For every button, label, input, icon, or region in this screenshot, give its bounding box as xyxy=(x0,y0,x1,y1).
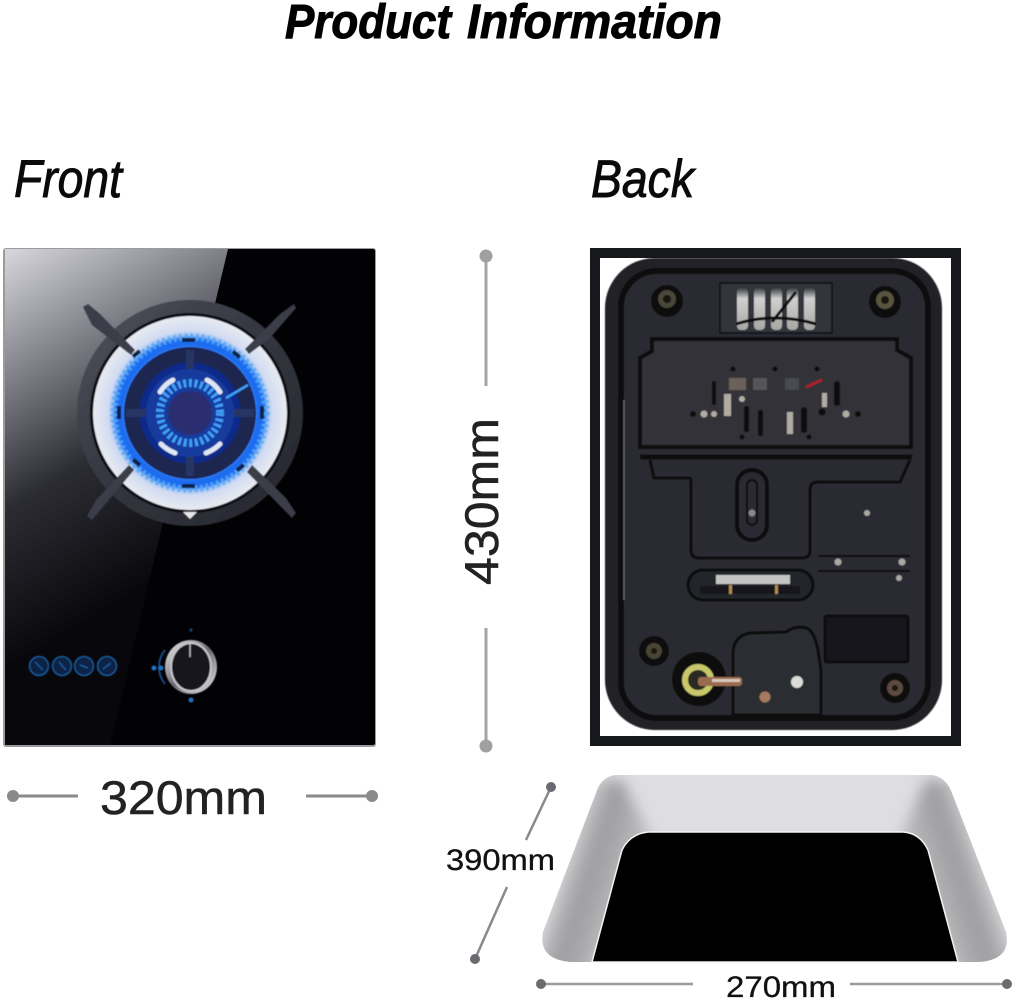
gas inlet xyxy=(672,652,742,706)
dimension: 320mm width: 320mm xyxy=(100,771,267,824)
lower T-shaped stamping xyxy=(640,457,912,558)
right rail xyxy=(818,510,910,581)
vent grille xyxy=(720,283,832,333)
burner cap spokes xyxy=(126,350,254,476)
pan support prongs xyxy=(83,304,296,520)
long oval window xyxy=(688,570,813,600)
back shell xyxy=(605,258,942,730)
title xyxy=(285,0,722,49)
frame xyxy=(595,253,956,741)
dimension: 270mm width xyxy=(536,971,1012,1001)
edge highlight xyxy=(623,400,625,600)
tray walls xyxy=(542,775,1007,962)
heading: Front: Front xyxy=(14,150,124,209)
upper plate xyxy=(640,339,911,447)
slot oval xyxy=(737,470,767,540)
burner xyxy=(77,300,303,526)
control knob xyxy=(152,628,217,702)
dimension: 320mm width xyxy=(7,771,378,824)
indicator icons xyxy=(30,656,116,676)
dimension: 390mm depth: 390mm xyxy=(446,844,555,877)
dimension: 430mm height xyxy=(455,250,508,752)
heading: Back: Back xyxy=(591,150,696,209)
valve housing xyxy=(733,627,821,715)
cutout tray diagram xyxy=(542,775,1007,962)
mounting screws xyxy=(639,285,910,703)
panel: cooktop back xyxy=(595,253,956,741)
rectangular recess xyxy=(825,616,908,662)
dimension: 430mm height: 430mm xyxy=(455,418,508,585)
white glints xyxy=(160,380,220,453)
tray black opening xyxy=(592,832,958,962)
panel: cooktop front xyxy=(3,248,376,747)
flame dark gaps xyxy=(117,338,264,488)
dimension: 390mm depth xyxy=(446,782,556,964)
